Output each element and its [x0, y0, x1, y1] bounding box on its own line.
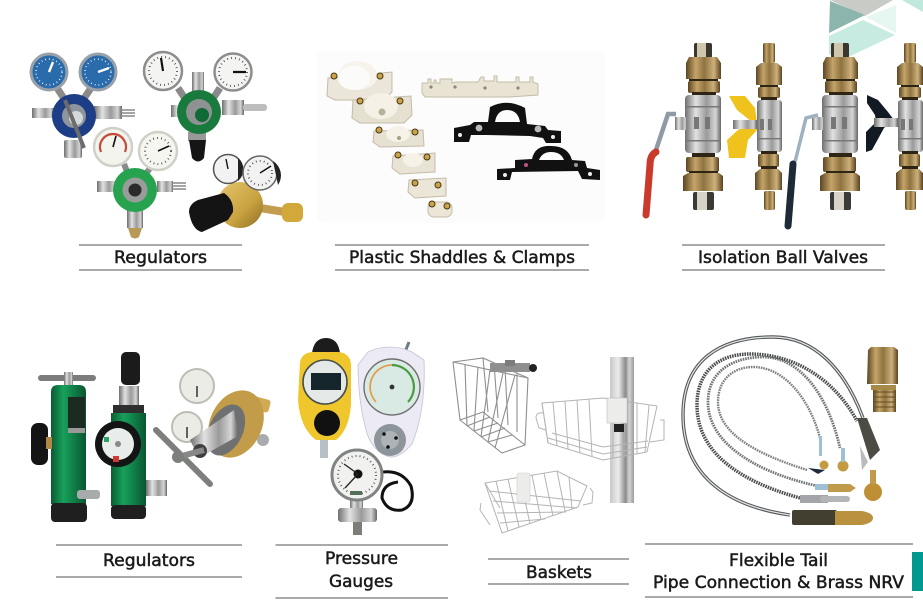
caption: Pressure Gauges [276, 545, 448, 598]
caption: Plastic Shaddles & Clamps: Plastic Shaddles & Clamps [349, 248, 575, 267]
caption: Flexible Tail Pipe Connection & Brass NRV: Flexible Tail [729, 551, 828, 570]
caption: Isolation Ball Valves: Isolation Ball Valves [698, 248, 868, 267]
panel: flexible tail pipe connection and brass NRV [645, 337, 913, 597]
caption: Pressure Gauges: Pressure [325, 549, 398, 568]
panel: isolation ball valves [646, 43, 923, 270]
product image: four ball valves with lever and butterfly handles [646, 43, 923, 226]
teal edge tab [912, 552, 923, 591]
caption: Regulators: Regulators [103, 551, 195, 570]
panel: baskets [453, 357, 664, 584]
product image: four gas regulators [31, 52, 303, 238]
caption: Pressure Gauges: Gauges [329, 572, 393, 591]
product image: three wire baskets and mounting pole [453, 357, 664, 533]
caption: Baskets: Baskets [526, 563, 592, 582]
panel: plastic saddles and clamps [317, 51, 605, 270]
panel: regulators (bottom left) [31, 352, 274, 577]
product image: green flow regulators and chrome-brass regulator [31, 352, 274, 522]
caption: Flexible Tail Pipe Connection & Brass NRV: Pipe Connection & Brass NRV [653, 573, 905, 592]
caption: Flexible Tail Pipe Connection & Brass NRV [645, 544, 913, 597]
product image: yellow digital gauge, white vacuum gauge, stainless pressure gauge [298, 338, 424, 535]
product image: flexible hoses and brass non-return valve [683, 337, 898, 525]
panel: pressure gauges [276, 338, 448, 598]
product image: white saddles and black clamps [317, 51, 605, 223]
corner decoration: teal triangles [829, 0, 923, 60]
caption: Regulators: Regulators [114, 248, 207, 267]
panel: regulators (top left) [31, 52, 303, 270]
